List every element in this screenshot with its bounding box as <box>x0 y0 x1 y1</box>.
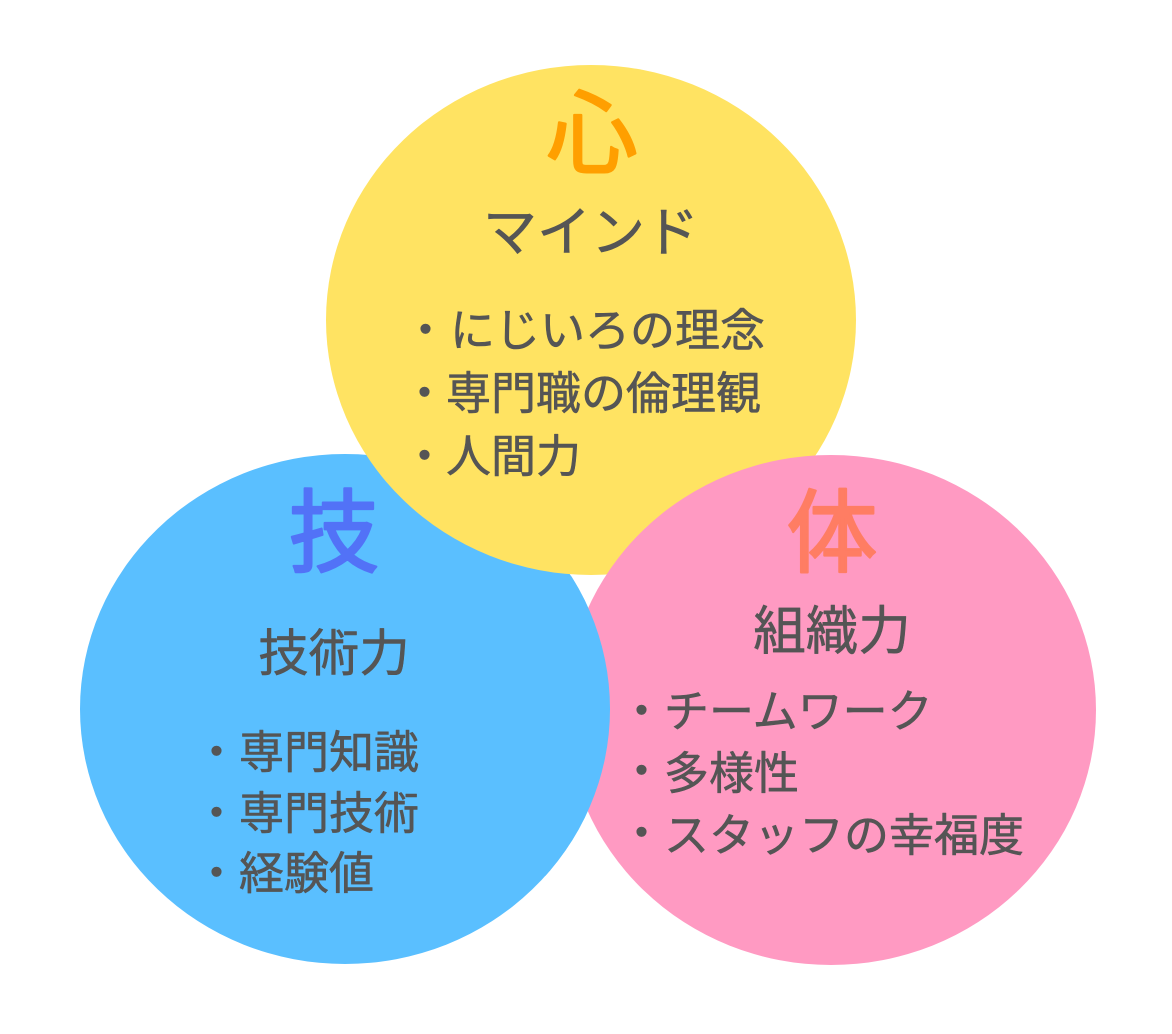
list: skill items: ・ <box>194 727 239 778</box>
list: mind items: ・ <box>402 368 447 419</box>
heading: mind: マインド <box>483 203 699 263</box>
panel: mind circle <box>326 65 856 575</box>
heading: organization: 組織力 <box>753 602 911 661</box>
list: body items <box>619 686 1024 861</box>
heading kanji: waza: 技 <box>288 484 380 585</box>
heading kanji: tai: 体 <box>786 484 878 585</box>
list: mind items: ・ <box>403 305 448 356</box>
skill circle overlapping body circle <box>545 576 610 876</box>
list: body items: ・ <box>619 746 664 797</box>
heading: technical skill: 技術力 <box>258 625 410 682</box>
list: body items: スタッフの幸福度 <box>664 810 1024 861</box>
list: mind items <box>402 305 765 482</box>
heading kanji: kokoro: 心 <box>546 85 638 186</box>
list: body items: チームワーク <box>664 686 933 737</box>
list: skill items <box>194 727 419 899</box>
list: skill items: 専門知識 <box>239 727 419 778</box>
list: body items: ・ <box>619 686 664 737</box>
list: skill items: ・ <box>194 848 239 899</box>
list: skill items: 経験値 <box>239 848 374 899</box>
list: mind items: ・ <box>402 431 447 482</box>
list: mind items: にじいろの理念 <box>450 305 765 356</box>
list: body items: 多様性 <box>664 748 799 799</box>
panel: skill circle <box>80 454 610 964</box>
panel: body circle <box>566 455 1096 965</box>
list: skill items: 専門技術 <box>239 788 419 839</box>
list: mind items: 専門職の倫理観 <box>446 368 761 419</box>
list: body items: ・ <box>619 808 664 859</box>
list: mind items: 人間力 <box>446 431 581 482</box>
list: skill items: ・ <box>194 788 239 839</box>
